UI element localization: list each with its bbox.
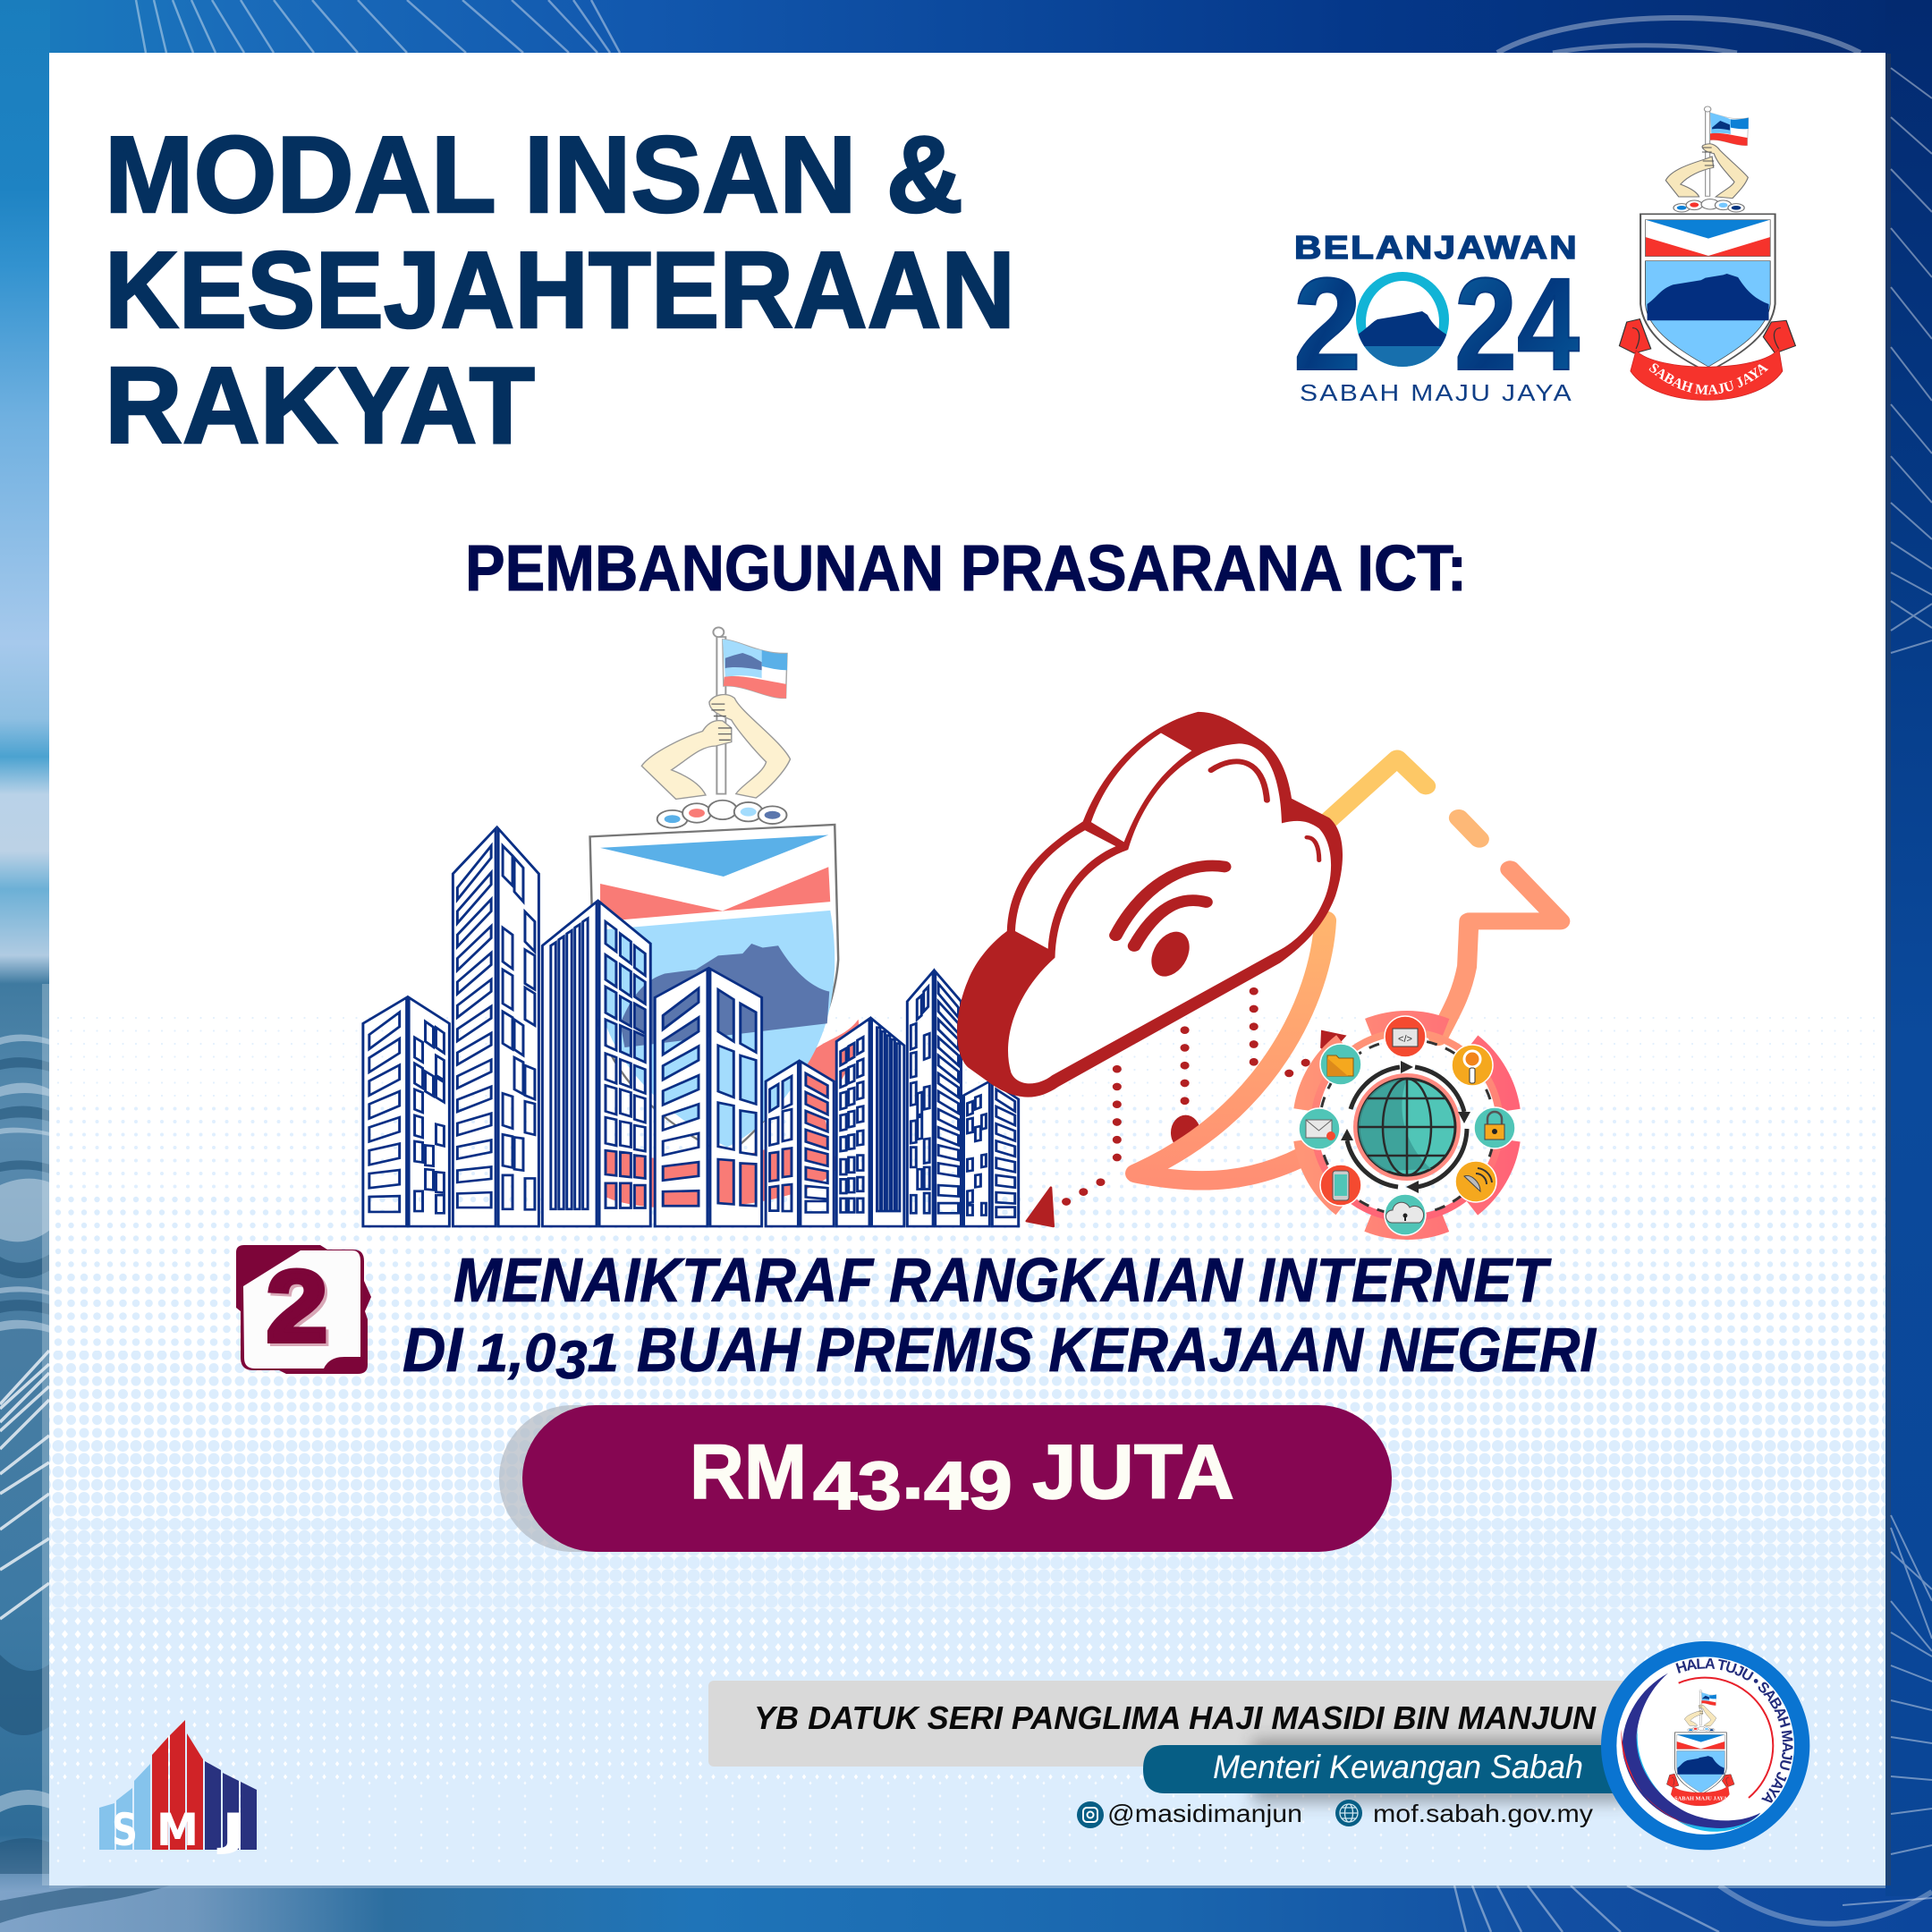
title: MODAL INSAN & [105,114,963,235]
title: RAKYAT [105,344,535,466]
icon: code window [1385,1016,1426,1057]
main description: 3 [555,1330,588,1390]
illustration: crest behind city buildings [363,627,1019,1226]
main description: 1,0 [477,1323,551,1383]
icon: smartphone [1320,1165,1361,1206]
roundel: Hala Tuju Sabah Maju Jaya: HALA TUJU • SABAH MAJU JAYA [1676,1658,1792,1803]
logo: Belanjawan 2024: BELANJAWAN [1294,229,1579,266]
dotted connectors and arrowheads [1027,991,1347,1226]
icon: cloud lock [1385,1194,1426,1235]
social links: @masidimanjun [1107,1800,1302,1827]
illustration: upload arrow, dotted lines and wifi cloud [957,712,1560,1226]
globe [1359,1079,1455,1175]
logo: SMJ: M [157,1804,199,1856]
number badge: 2 [269,1253,330,1365]
number badge: 2 [267,1250,327,1362]
logo: SMJ [99,1720,257,1856]
icon: code window: </> [1398,1034,1412,1045]
main description: DI [402,1315,463,1385]
rotating arrows [1341,1061,1470,1193]
icon: padlock [1474,1107,1515,1148]
logo: Sabah coat of arms [1619,106,1796,401]
minister title bar [1143,1740,1637,1802]
minister title bar: Menteri Kewangan Sabah [1213,1749,1583,1785]
budget amount pill: 49 [924,1448,1013,1524]
icon: satellite dish [1455,1161,1496,1202]
roundel: Hala Tuju Sabah Maju Jaya [1601,1641,1810,1850]
flag and arms [641,627,790,828]
number badge [236,1245,371,1374]
minister name bar [708,1681,1639,1767]
logo: Belanjawan 2024: 24 [1454,251,1580,398]
logo: Belanjawan 2024: SABAH MAJU JAYA [1300,379,1573,406]
minister name bar: YB DATUK SERI PANGLIMA HAJI MASIDI BIN MANJUN [754,1699,1597,1736]
social links: mof.sabah.gov.my [1373,1800,1593,1827]
budget amount pill: JUTA [1032,1429,1234,1515]
main description [402,1245,1597,1390]
budget amount pill: . [902,1437,924,1513]
main description: BUAH PREMIS KERAJAAN NEGERI [637,1315,1597,1385]
title [105,114,1015,466]
logo: Sabah coat of arms: SABAH MAJU JAYA [1649,363,1769,395]
shield [590,825,859,1208]
budget amount pill [499,1405,1392,1552]
icon: magnifier [1452,1045,1493,1086]
main description: 1 [588,1323,619,1383]
budget amount pill: 43 [813,1448,902,1524]
cloud with wifi symbol [957,712,1343,1097]
title: KESEJAHTERAAN [105,229,1015,351]
budget amount pill: RM [690,1429,807,1515]
icon: globe [1335,1800,1362,1826]
logo: SMJ: J [216,1804,247,1856]
icon: mail [1299,1108,1340,1149]
main description: MENAIKTARAF RANGKAIAN INTERNET [453,1245,1552,1315]
roundel: Hala Tuju Sabah Maju Jaya: SABAH MAJU JAYA [1674,1796,1728,1802]
social links [1077,1800,1593,1828]
subtitle: PEMBANGUNAN PRASARANA ICT: [465,533,1467,605]
icon: folder [1320,1044,1361,1085]
city buildings [363,828,1019,1226]
rising arrow [1136,758,1560,1181]
logo: Belanjawan 2024: 2 [1293,251,1361,398]
logo: SMJ: S [112,1804,138,1856]
illustration: network gear with globe and icons [1299,1016,1515,1235]
gear [1303,1021,1511,1229]
icon: instagram [1077,1801,1104,1828]
logo: Belanjawan 2024 [1293,229,1580,406]
